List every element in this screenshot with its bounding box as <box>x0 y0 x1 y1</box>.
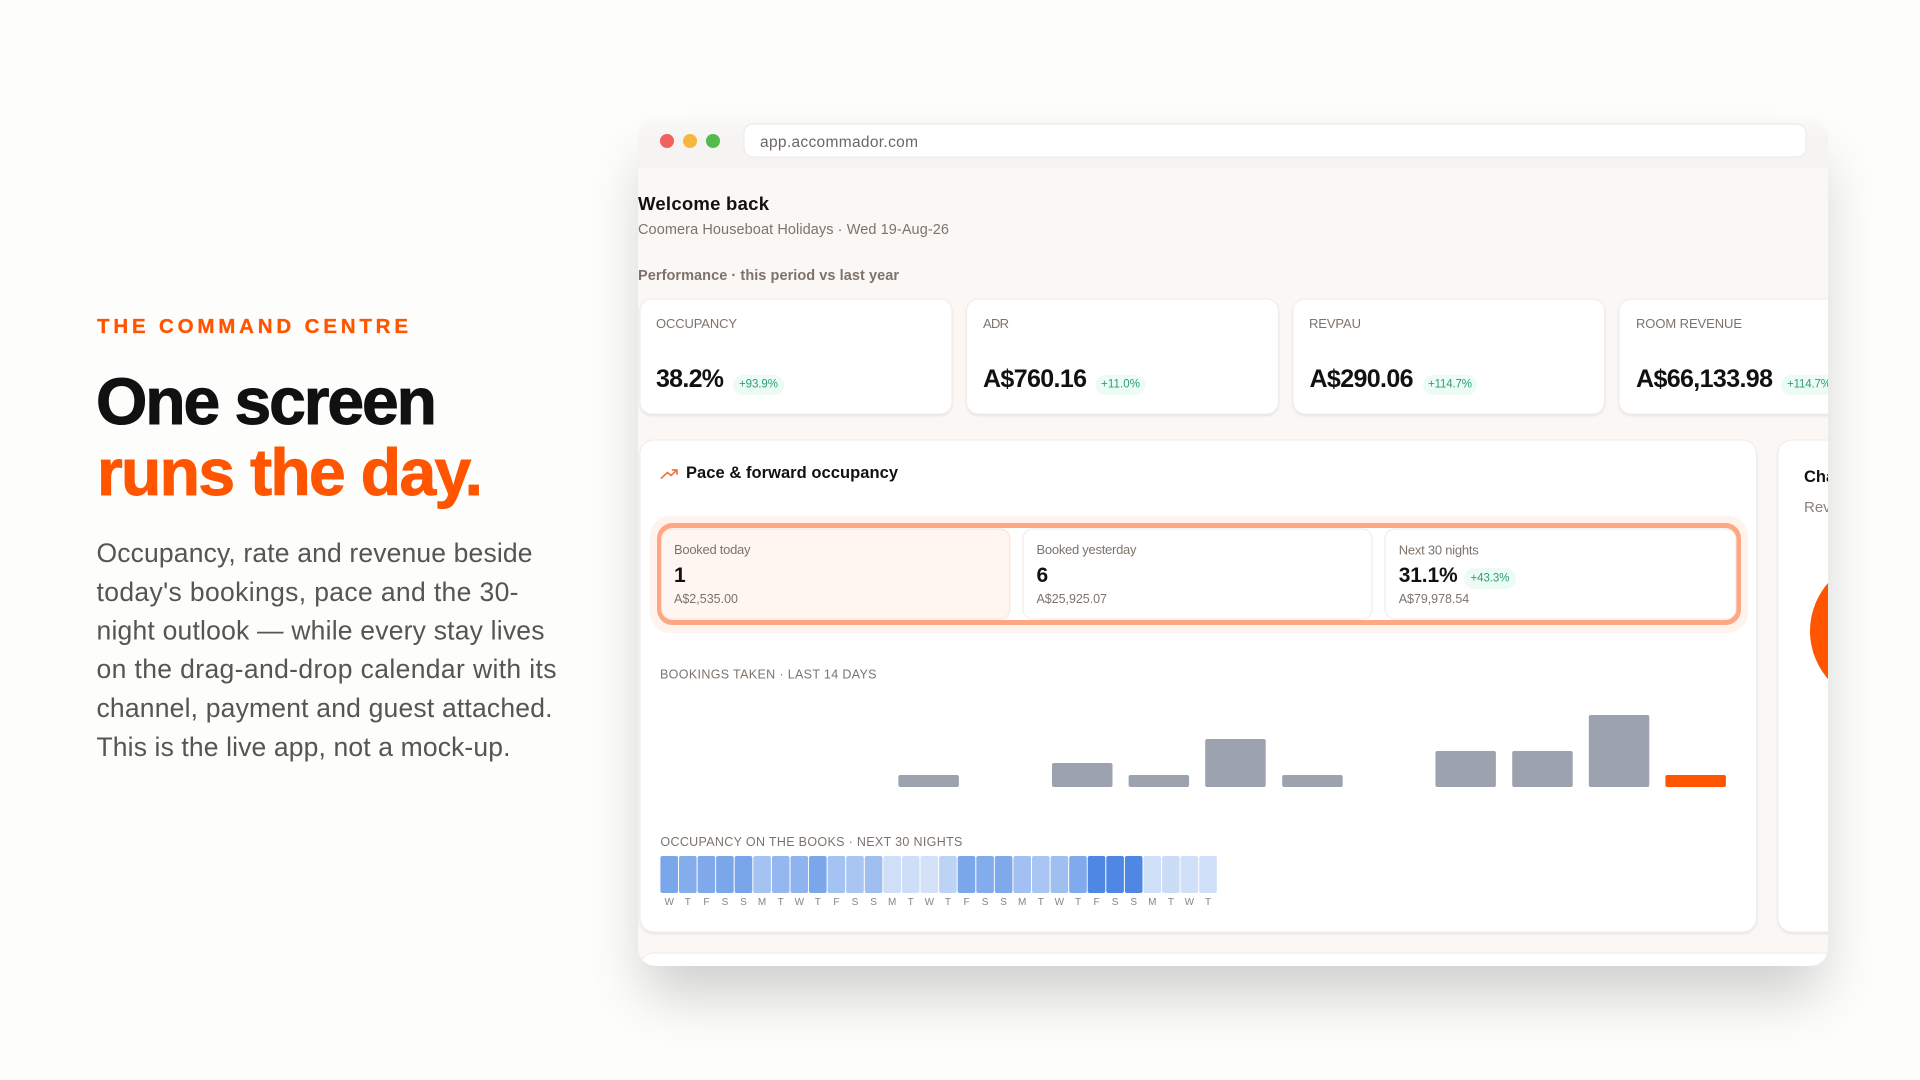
body paragraph: channel, payment and guest attached. <box>96 693 552 723</box>
weekday labels: W <box>1055 897 1065 908</box>
bar chart: bookings taken: BOOKINGS TAKEN · LAST 14 DAYS <box>660 668 876 682</box>
tile: booked yesterday: Booked yesterday <box>1036 542 1137 557</box>
weekday labels: M <box>888 897 896 908</box>
KPI card: RevPAU <box>1293 299 1604 414</box>
KPI card: room revenue: A$66,133.98 <box>1636 365 1773 393</box>
tile: next 30 nights: A$79,978.54 <box>1399 592 1469 606</box>
panel: channel mix (cropped): Channel <box>1804 468 1869 486</box>
weekday labels: F <box>703 897 709 908</box>
weekday labels: W <box>925 897 935 908</box>
weekday labels: T <box>685 897 691 908</box>
tile: booked yesterday: 6 <box>1036 564 1048 587</box>
tile: next 30 nights: +43.3% <box>1470 572 1510 584</box>
tile: next 30 nights: Next 30 nights <box>1399 542 1479 558</box>
window shadow <box>644 160 1822 995</box>
body paragraph: today's bookings, pace and the 30- <box>96 577 518 607</box>
weekday labels: S <box>852 897 859 908</box>
weekday labels: M <box>1148 897 1156 908</box>
browser toolbar <box>660 124 1806 158</box>
panel heading: Pace & forward occupancy <box>686 464 899 482</box>
KPI card: RevPAU: REVPAU <box>1309 316 1361 331</box>
welcome heading: Coomera Houseboat Holidays · Wed 19-Aug-26 <box>638 222 949 238</box>
KPI card: occupancy: OCCUPANCY <box>656 316 737 331</box>
KPI card: room revenue: +114.7% <box>1787 378 1831 390</box>
panel: pace and forward occupancy <box>640 440 1756 932</box>
weekday labels: T <box>1038 897 1044 908</box>
KPI card: room revenue <box>1618 298 1828 416</box>
tile: booked today <box>662 529 1010 619</box>
KPI card: ADR: A$760.16 <box>983 365 1087 393</box>
body paragraph: Occupancy, rate and revenue beside <box>96 538 532 568</box>
chart: channel pie <box>1810 583 1828 679</box>
welcome heading <box>638 196 948 237</box>
address bar <box>744 124 1806 157</box>
weekday labels: T <box>815 897 821 908</box>
KPI card: occupancy: 38.2% <box>656 365 724 393</box>
weekday labels: S <box>1112 897 1119 908</box>
highlighted booking tiles <box>650 516 1748 633</box>
KPI card: ADR: +11.0% <box>1101 378 1140 390</box>
weekday labels: W <box>1185 897 1195 908</box>
KPI card: room revenue: ROOM REVENUE <box>1636 316 1742 331</box>
weekday labels: W <box>664 897 674 908</box>
headline: One screen <box>96 364 437 438</box>
browser window <box>638 124 1828 966</box>
KPI card: occupancy: +93.9% <box>739 378 778 390</box>
weekday labels: S <box>740 897 747 908</box>
icon: trending up <box>662 470 677 478</box>
performance section label: Performance · this period vs last year <box>638 268 899 284</box>
body paragraph: This is the live app, not a mock-up. <box>96 732 510 762</box>
weekday labels: W <box>795 897 805 908</box>
body paragraph: on the drag-and-drop calendar with its <box>96 654 556 684</box>
weekday labels: S <box>870 897 877 908</box>
weekday labels: F <box>833 897 839 908</box>
body paragraph: night outlook — while every stay lives <box>96 616 544 646</box>
tile: next 30 nights <box>1385 529 1736 619</box>
heatmap: occupancy on the books: OCCUPANCY ON THE BOOKS · NEXT 30 NIGHTS <box>660 835 962 849</box>
tile: booked yesterday <box>1023 529 1372 619</box>
weekday labels: S <box>982 897 989 908</box>
tile: booked today: Booked today <box>674 542 751 557</box>
weekday labels: M <box>1018 897 1026 908</box>
bar chart: bookings taken <box>660 668 1726 787</box>
body paragraph <box>96 538 556 762</box>
weekday labels: T <box>778 897 784 908</box>
weekday labels <box>664 898 1211 905</box>
tile: booked today: 1 <box>674 564 686 587</box>
address bar: app.accommador.com <box>760 134 918 151</box>
weekday labels: M <box>758 897 766 908</box>
weekday labels: F <box>1093 897 1100 908</box>
KPI card: RevPAU: +114.7% <box>1428 378 1472 390</box>
weekday labels: T <box>1075 897 1081 908</box>
tile: booked today: A$2,535.00 <box>674 592 738 606</box>
weekday labels: F <box>963 897 970 908</box>
weekday labels: T <box>1205 897 1211 908</box>
weekday labels: T <box>1168 897 1174 908</box>
weekday labels: T <box>908 897 914 908</box>
heatmap: occupancy on the books <box>660 835 1217 908</box>
text column <box>96 315 556 762</box>
tile: booked yesterday: A$25,925.07 <box>1036 592 1107 606</box>
icon: window dots <box>660 134 720 148</box>
panel: channel mix (cropped): Revenue <box>1804 499 1864 516</box>
KPI card: RevPAU: A$290.06 <box>1310 365 1414 393</box>
KPI card: occupancy <box>640 299 952 414</box>
tile: next 30 nights: 31.1% <box>1399 564 1458 587</box>
headline: runs the day. <box>97 435 483 509</box>
headline <box>96 364 483 509</box>
eyebrow: THE COMMAND CENTRE <box>97 315 408 338</box>
weekday labels: S <box>722 897 729 908</box>
weekday labels: T <box>945 897 951 908</box>
KPI card: ADR: ADR <box>983 316 1009 331</box>
panel: channel mix (cropped) <box>1778 440 1828 934</box>
weekday labels: S <box>1000 897 1007 908</box>
KPI card: ADR <box>966 299 1278 414</box>
panel: lower section (cropped) <box>642 952 1827 966</box>
welcome heading: Welcome back <box>638 193 770 214</box>
weekday labels: S <box>1130 897 1137 908</box>
